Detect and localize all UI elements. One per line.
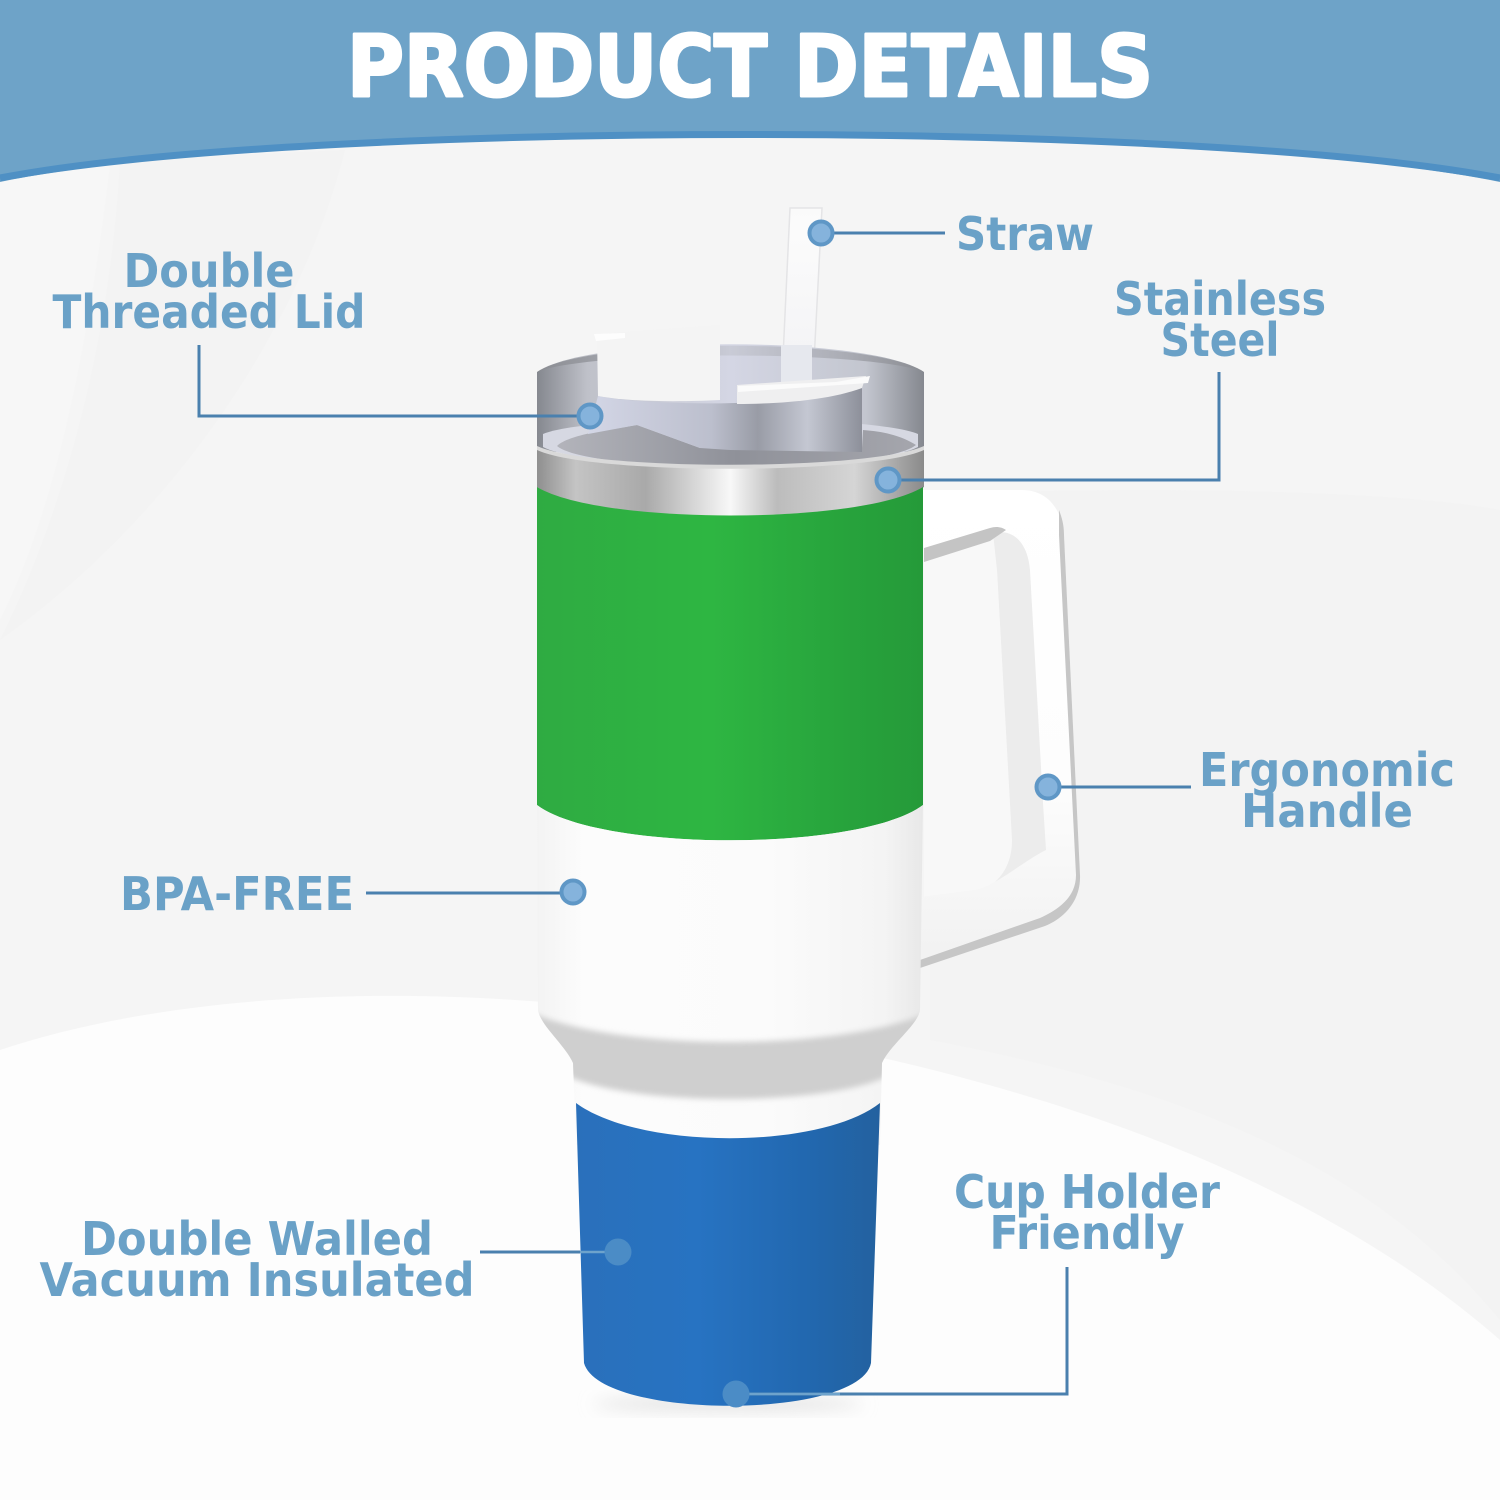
straw inside lid (781, 345, 812, 388)
callout: bpa-free: BPA-FREE (120, 867, 354, 921)
lid back edge (537, 346, 924, 372)
callout: bpa-free (120, 867, 584, 921)
handle inner bevel (993, 532, 1046, 882)
handle top underside (924, 527, 1006, 562)
gray taper shading (530, 1012, 930, 1099)
slider tab (737, 376, 866, 404)
callout: stainless steel: Stainless (1114, 272, 1326, 326)
steel ring (537, 447, 924, 516)
spout housing (588, 388, 862, 452)
straw (781, 208, 822, 400)
green band (537, 487, 923, 840)
callout: double threaded lid: Threaded Lid (52, 285, 366, 339)
header banner (0, 0, 1500, 182)
base shadow (593, 1397, 863, 1411)
callout: ergonomic handle: Handle (1241, 784, 1413, 838)
callout: stainless steel: Steel (1160, 313, 1280, 367)
callout: double threaded lid: Double (124, 244, 294, 298)
flip cap (597, 325, 720, 401)
callout: stainless steel (876, 272, 1326, 492)
tumbler (530, 208, 1080, 1411)
callout: ergonomic handle (1036, 743, 1455, 838)
callout: double walled vacuum insulated (40, 1212, 632, 1307)
handle outer edge (920, 510, 1080, 968)
lid interior (543, 419, 918, 466)
lid rim (537, 344, 924, 452)
callout: cup holder friendly: Cup Holder (954, 1165, 1220, 1219)
callout: cup holder friendly: Friendly (990, 1206, 1185, 1260)
handle (920, 490, 1080, 968)
callout: straw (810, 207, 1094, 261)
well (557, 425, 916, 467)
white body (537, 805, 923, 1145)
callout: straw: Straw (956, 207, 1094, 261)
callout: double threaded lid (52, 244, 602, 428)
callout: cup holder friendly (722, 1165, 1220, 1408)
callout: ergonomic handle: Ergonomic (1199, 743, 1455, 797)
callout: double walled vacuum insulated: Vacuum Insulated (40, 1253, 474, 1307)
title: PRODUCT DETAILS (347, 18, 1153, 117)
callout: double walled vacuum insulated: Double Walled (81, 1212, 433, 1266)
blue base (576, 1103, 880, 1406)
